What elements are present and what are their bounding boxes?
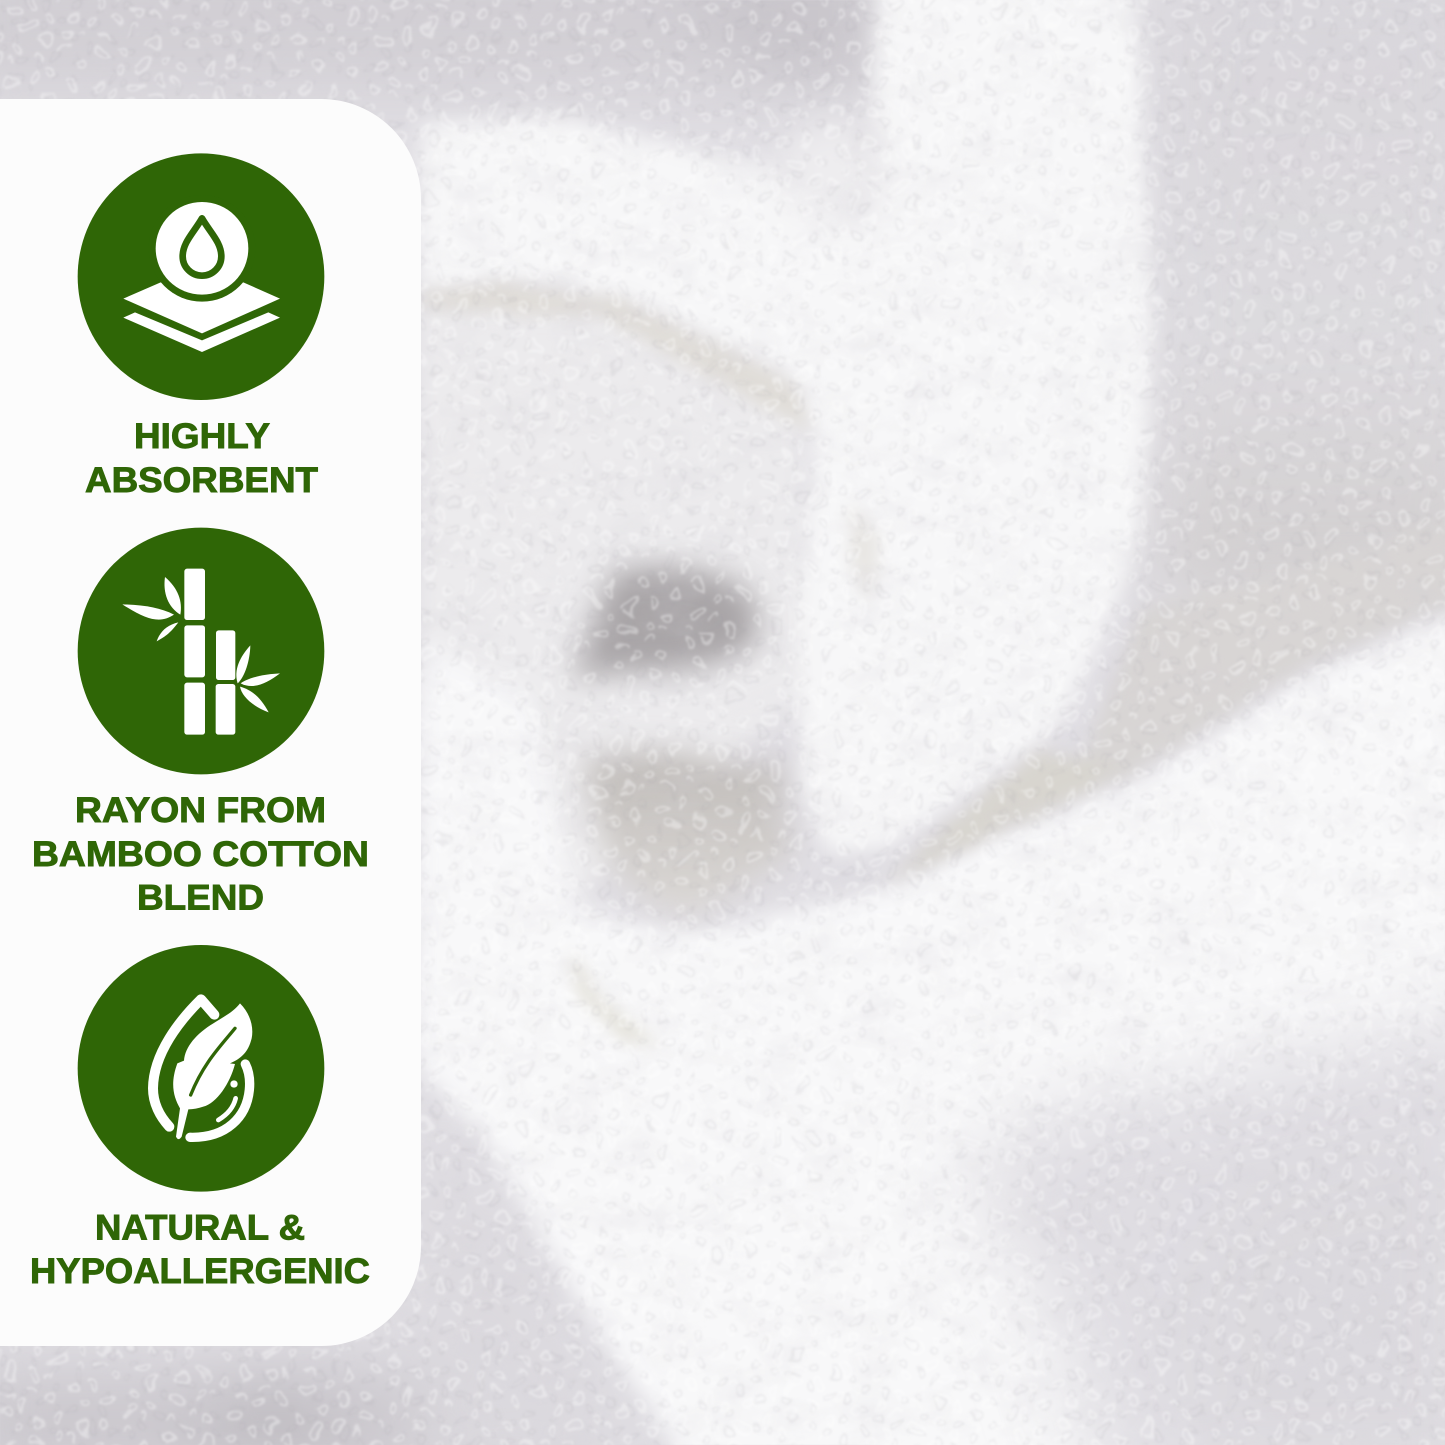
feature: rayon from bamboo cotton blend <box>32 528 369 918</box>
feature: natural and hypoallergenic <box>30 945 370 1291</box>
heading: natural and hypoallergenic: NATURAL & <box>95 1208 305 1248</box>
icon: feather and drop <box>78 945 324 1192</box>
icon: bamboo <box>78 528 324 774</box>
heading: natural and hypoallergenic <box>30 1208 370 1291</box>
icon: water drop over layers <box>78 153 324 400</box>
heading: highly absorbent: HIGHLY <box>134 417 270 456</box>
panel: white rounded card <box>0 99 421 1346</box>
feature: highly absorbent <box>78 153 324 500</box>
heading: natural and hypoallergenic: HYPOALLERGENIC <box>30 1252 370 1291</box>
heading: highly absorbent: ABSORBENT <box>85 461 318 500</box>
heading: rayon from bamboo cotton blend: RAYON FROM <box>75 791 326 830</box>
heading: highly absorbent <box>85 417 318 500</box>
heading: rayon from bamboo cotton blend <box>32 791 369 918</box>
heading: rayon from bamboo cotton blend: BAMBOO COTTON <box>32 835 369 874</box>
heading: rayon from bamboo cotton blend: BLEND <box>137 878 264 918</box>
